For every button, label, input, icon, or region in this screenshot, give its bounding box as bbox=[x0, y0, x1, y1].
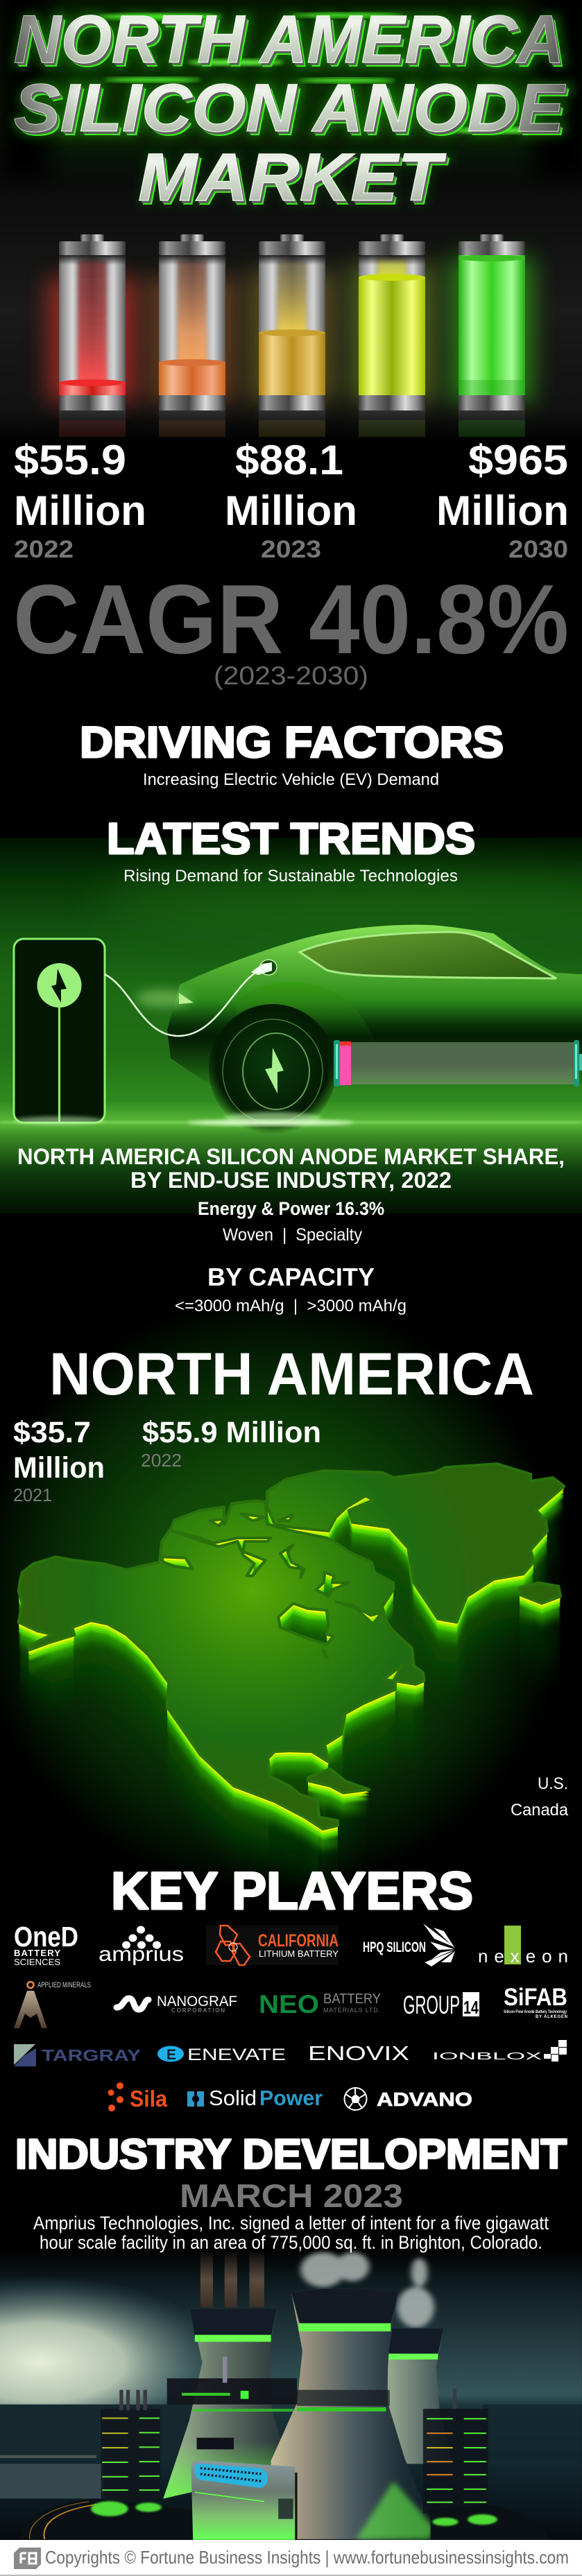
stat: 2021 value bbox=[13, 1416, 105, 1505]
title: NORTH AMERICA bbox=[17, 6, 567, 81]
logo: OneD Battery Sciences bbox=[14, 1921, 78, 1967]
title: MARKET bbox=[140, 142, 449, 218]
logo: SiFAB: SiFAB bbox=[504, 1984, 567, 2011]
left cooling tower bbox=[163, 2309, 289, 2498]
road light bbox=[0, 1120, 582, 1125]
heading: market share bbox=[17, 1144, 565, 1193]
stat: 2022 value: $55.9 bbox=[14, 437, 126, 483]
title: NORTH AMERICA bbox=[16, 4, 566, 80]
title: NORTH AMERICA bbox=[14, 1, 564, 77]
logo: Neo Battery Materials: MATERIALS LTD. bbox=[323, 2007, 380, 2014]
logo: Targray bbox=[14, 2044, 141, 2066]
central cooling tower bbox=[271, 2288, 434, 2539]
heading: key players: KEY PLAYERS bbox=[111, 1862, 473, 1921]
heading: latest trends: LATEST TRENDS bbox=[107, 815, 475, 863]
logo: California Lithium Battery: LITHIUM BATTERY bbox=[259, 1948, 339, 1959]
title: SILICON ANODE bbox=[17, 74, 570, 150]
country list: U.S. bbox=[538, 1774, 568, 1793]
development text bbox=[33, 2213, 549, 2253]
country list: Canada bbox=[511, 1801, 569, 1819]
title: SILICON ANODE bbox=[14, 70, 566, 146]
logo: Neo Battery Materials: BATTERY bbox=[323, 1991, 381, 2007]
stat: 2022 value: Million bbox=[14, 487, 146, 534]
logo: Neo Battery Materials: NEO bbox=[259, 1990, 319, 2019]
heading: north america: NORTH AMERICA bbox=[49, 1341, 534, 1408]
logo: Targray: TARGRAY bbox=[42, 2046, 141, 2064]
logo: Enevate bbox=[157, 2046, 286, 2064]
logo: Enovix: ENOVIX bbox=[308, 2043, 409, 2065]
stat: 2030 value bbox=[436, 437, 569, 563]
logo: Sila bbox=[108, 2082, 168, 2111]
logo: Enevate: ENEVATE bbox=[187, 2046, 286, 2064]
panel: power plant illustration bbox=[0, 2249, 582, 2540]
stat: 2021 value: $35.7 bbox=[13, 1416, 91, 1449]
logo: Solid Power bbox=[187, 2086, 323, 2110]
logo: OneD Battery Sciences: SCIENCES bbox=[14, 1957, 60, 1967]
footer logo bbox=[14, 2548, 41, 2569]
chimneys bbox=[200, 2252, 264, 2308]
logo: Neo Battery Materials bbox=[259, 1990, 381, 2019]
car body bbox=[167, 925, 582, 1089]
stat: 2030 value: Million bbox=[436, 487, 569, 534]
battery: lime bbox=[350, 234, 435, 438]
driving factor text: Increasing Electric Vehicle (EV) Demand bbox=[143, 770, 439, 789]
title bbox=[14, 1, 570, 219]
footer bbox=[0, 2540, 582, 2576]
heading: driving factors: DRIVING FACTORS bbox=[80, 718, 504, 767]
share value: Energy & Power 16.3% bbox=[198, 1198, 384, 1219]
logo: Amprius bbox=[99, 1926, 184, 1966]
stat: 2023 value bbox=[225, 437, 357, 563]
logo: OneD Battery Sciences: BATTERY bbox=[14, 1948, 60, 1958]
stat: 2021 value: Million bbox=[13, 1451, 105, 1485]
logo: Solid Power: Power bbox=[259, 2086, 323, 2110]
logo: Nanograf: NANOGRAF bbox=[157, 1994, 237, 2009]
logo: Enevate: E bbox=[166, 2047, 176, 2063]
heading: by capacity: BY CAPACITY bbox=[207, 1263, 375, 1291]
logo: SiFAB: BY ALKEGEN bbox=[536, 2015, 567, 2019]
logo: Solid Power: Solid bbox=[209, 2086, 257, 2110]
logo: Group14: GROUP bbox=[403, 1991, 460, 2019]
title: MARKET bbox=[139, 141, 451, 216]
battery: yellow bbox=[250, 234, 334, 438]
logo: Applied Minerals bbox=[14, 1981, 91, 2028]
stat: 2022 regional value bbox=[141, 1416, 321, 1471]
map: north america bbox=[19, 1464, 564, 1871]
stat: 2023 value: $88.1 bbox=[235, 437, 343, 483]
stat: 2022 regional value: $55.9 Million bbox=[142, 1416, 321, 1449]
country list bbox=[511, 1774, 569, 1819]
panel: regional map glow bbox=[0, 1297, 582, 1886]
car window bbox=[300, 932, 556, 978]
logo: SiFAB: Silicon Flow Anode Battery Technology bbox=[504, 2010, 567, 2014]
title: MARKET bbox=[138, 139, 447, 215]
latest trend text: Rising Demand for Sustainable Technologies bbox=[123, 867, 458, 885]
logo: Nanograf: CORPORATION bbox=[171, 2007, 225, 2014]
heading: industry development: INDUSTRY DEVELOPMENT bbox=[15, 2131, 567, 2177]
logo: California Lithium Battery: CALIFORNIA bbox=[258, 1931, 339, 1951]
logo: Advano: ADVANO bbox=[377, 2089, 472, 2110]
panel: header background bbox=[0, 0, 582, 444]
development date: MARCH 2023 bbox=[180, 2177, 403, 2214]
logo: Nanograf bbox=[117, 1994, 237, 2014]
logo: Amprius: amprius bbox=[99, 1943, 184, 1966]
logo: HPQ Silicon: HPQ SILICON bbox=[363, 1939, 426, 1955]
process platform bbox=[167, 2357, 390, 2449]
smoke bbox=[300, 2252, 434, 2328]
title: SILICON ANODE bbox=[16, 73, 568, 148]
logo: California Lithium Battery bbox=[206, 1926, 339, 1965]
logo: Nexeon: nexeon bbox=[478, 1946, 568, 1966]
stat: 2023 value: 2023 bbox=[261, 536, 321, 563]
ground ring bbox=[22, 2498, 549, 2540]
right cooling tower bbox=[388, 2328, 453, 2464]
charging cable bbox=[105, 960, 277, 1036]
segment list: Woven | Specialty bbox=[223, 1225, 362, 1245]
logo: Ionblox: IONBLOX bbox=[432, 2050, 542, 2062]
car fender bbox=[236, 982, 378, 1047]
title: NORTH AMERICA bbox=[15, 3, 568, 78]
stat: 2030 value: 2030 bbox=[508, 536, 568, 563]
heading: market share: NORTH AMERICA SILICON ANODE MARKET SHARE, bbox=[17, 1144, 565, 1169]
logo: Sila: Sila bbox=[130, 2086, 168, 2111]
logo: Nexeon bbox=[478, 1926, 568, 1966]
logo: Ionblox bbox=[432, 2040, 567, 2062]
title: SILICON ANODE bbox=[15, 71, 570, 147]
CAGR period: (2023-2030) bbox=[214, 662, 368, 690]
stat: 2021 value: 2021 bbox=[13, 1485, 52, 1505]
logo: OneD Battery Sciences: OneD bbox=[14, 1921, 78, 1953]
logo: Group14: 14 bbox=[463, 1997, 479, 2018]
battery: orange bbox=[149, 234, 236, 438]
stat: 2022 regional value: 2022 bbox=[141, 1450, 182, 1471]
battery: green bbox=[450, 234, 534, 438]
logo: Applied Minerals: APPLIED MINERALS bbox=[37, 1981, 91, 1989]
title: SILICON ANODE bbox=[14, 70, 566, 146]
stat: 2030 value: $965 bbox=[468, 437, 568, 483]
logo: Advano bbox=[344, 2088, 472, 2110]
stat: 2022 value bbox=[14, 437, 146, 563]
heading: market share: BY END-USE INDUSTRY, 2022 bbox=[130, 1168, 452, 1193]
car headlight bbox=[135, 990, 194, 1007]
side structure right bbox=[423, 2389, 488, 2513]
capacity list: <=3000 mAh/g | >3000 mAh/g bbox=[175, 1297, 406, 1315]
stat: 2022 value: 2022 bbox=[14, 536, 74, 563]
blue cooling unit bbox=[191, 2460, 298, 2540]
battery bar bbox=[334, 1040, 582, 1087]
charging station bbox=[14, 939, 105, 1125]
side structure left bbox=[101, 2390, 160, 2502]
title: MARKET bbox=[142, 144, 450, 219]
battery: red bbox=[47, 234, 137, 438]
wheel bbox=[209, 1004, 336, 1134]
panel: electric vehicle illustration bbox=[0, 838, 582, 1213]
stat: 2023 value: Million bbox=[225, 487, 357, 534]
logo: HPQ Silicon bbox=[363, 1924, 455, 1966]
title: NORTH AMERICA bbox=[14, 1, 564, 77]
